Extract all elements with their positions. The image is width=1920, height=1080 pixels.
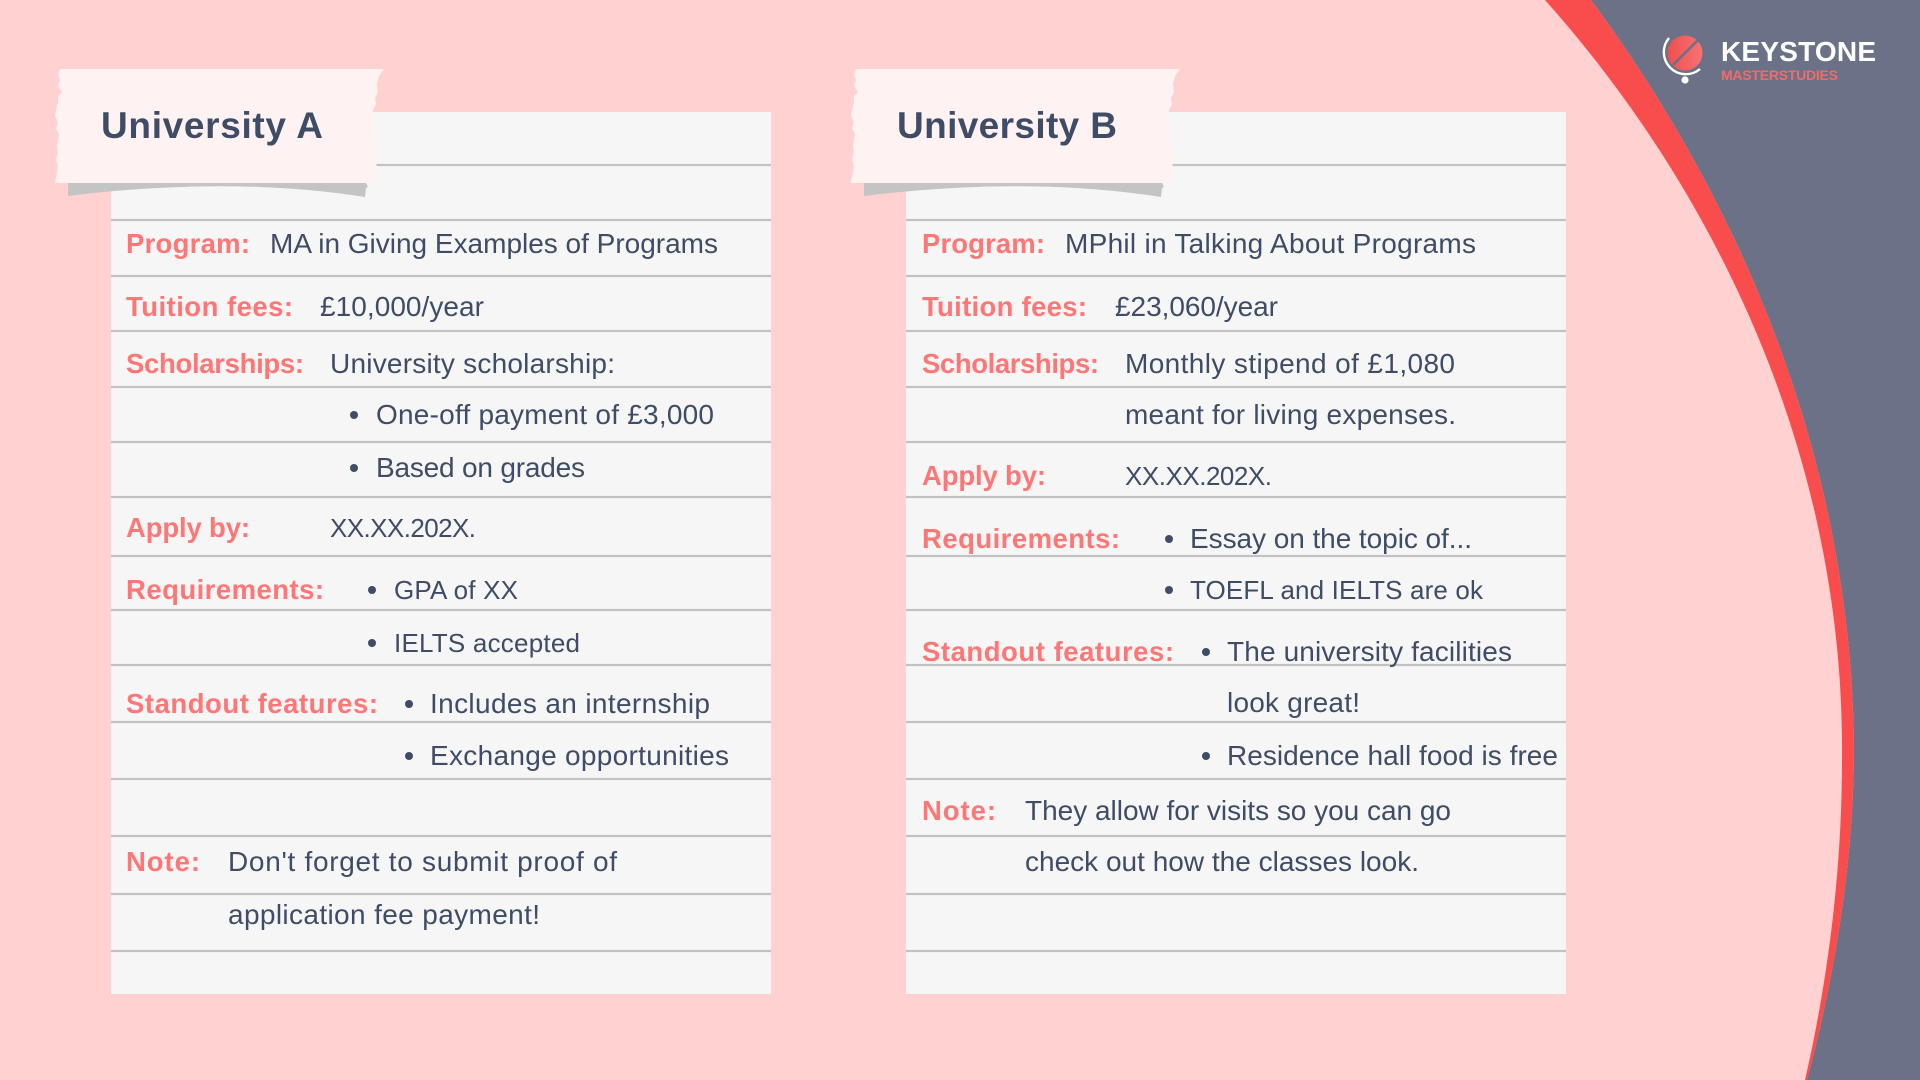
tape B bbox=[851, 69, 1180, 183]
row: requirements: Essay on the topic of... bbox=[1190, 523, 1472, 554]
row: apply by: Apply by: bbox=[126, 512, 250, 543]
row: scholarships: meant for living expenses. bbox=[1125, 399, 1456, 430]
tape shadow A bbox=[68, 183, 368, 197]
row: requirements: GPA of XX bbox=[394, 575, 518, 605]
row: note: Note: bbox=[126, 846, 200, 877]
row: note: application fee payment! bbox=[228, 899, 540, 930]
row: note bbox=[126, 846, 617, 930]
row: note: Don't forget to submit proof of bbox=[228, 846, 617, 877]
row: scholarships: Monthly stipend of £1,080 bbox=[1125, 348, 1455, 379]
panel: University A bbox=[55, 69, 771, 994]
row: note bbox=[922, 795, 1451, 877]
row: scholarships bbox=[922, 348, 1456, 430]
corner shape: grey panel bbox=[1591, 0, 1920, 1080]
logo wordmark: KEYSTONE bbox=[1721, 36, 1876, 67]
row: standout features bbox=[126, 688, 729, 771]
row: apply by: XX.XX.202X. bbox=[1125, 461, 1272, 491]
row: tuition fees bbox=[126, 291, 484, 322]
row: tuition fees: Tuition fees: bbox=[922, 291, 1087, 322]
heading: University B: University B bbox=[897, 105, 1117, 146]
row: tuition fees bbox=[922, 291, 1278, 322]
row: requirements bbox=[126, 574, 580, 658]
row: scholarships: One-off payment of £3,000 bbox=[376, 399, 714, 430]
heading: University A: University A bbox=[101, 105, 323, 146]
panel: University B bbox=[851, 69, 1566, 994]
row: requirements: IELTS accepted bbox=[394, 628, 580, 658]
row: note: They allow for visits so you can go bbox=[1025, 795, 1451, 826]
row: standout features: Residence hall food is free bbox=[1227, 740, 1558, 771]
logo subtitle: MASTERSTUDIES bbox=[1721, 67, 1838, 83]
row: requirements: Requirements: bbox=[922, 523, 1120, 554]
paper sheet B bbox=[906, 112, 1566, 994]
row: note: check out how the classes look. bbox=[1025, 846, 1419, 877]
row: standout features: Standout features: bbox=[126, 688, 378, 719]
row: standout features: Exchange opportunities bbox=[430, 740, 729, 771]
icon: globe bbox=[1664, 36, 1702, 84]
row: note: Note: bbox=[922, 795, 996, 826]
row: scholarships: University scholarship: bbox=[330, 348, 615, 379]
row: tuition fees: Tuition fees: bbox=[126, 291, 293, 322]
row: requirements: Requirements: bbox=[126, 574, 324, 605]
row: standout features bbox=[922, 636, 1558, 771]
row: scholarships: Scholarships: bbox=[922, 348, 1099, 379]
row: program: Program: bbox=[922, 228, 1045, 259]
row: tuition fees: £23,060/year bbox=[1115, 291, 1278, 322]
row: apply by bbox=[126, 512, 476, 543]
row: scholarships: Based on grades bbox=[376, 452, 585, 483]
row: standout features: Includes an internship bbox=[430, 688, 710, 719]
row: apply by bbox=[922, 460, 1272, 491]
row: tuition fees: £10,000/year bbox=[320, 291, 484, 322]
row: apply by: Apply by: bbox=[922, 460, 1046, 491]
paper sheet A bbox=[111, 112, 771, 994]
row: requirements: TOEFL and IELTS are ok bbox=[1190, 575, 1484, 605]
row: program: Program: bbox=[126, 228, 250, 259]
corner shape: red arc bbox=[1545, 0, 1854, 1080]
row: program: MPhil in Talking About Programs bbox=[1065, 228, 1476, 259]
row: scholarships: Scholarships: bbox=[126, 348, 304, 379]
row: standout features: Standout features: bbox=[922, 636, 1174, 667]
row: scholarships bbox=[126, 348, 714, 483]
row: apply by: XX.XX.202X. bbox=[330, 513, 476, 543]
tape shadow B bbox=[864, 183, 1164, 197]
logo bbox=[1664, 36, 1876, 84]
row: requirements bbox=[922, 523, 1484, 605]
tape A bbox=[55, 69, 384, 183]
row: standout features: look great! bbox=[1227, 687, 1360, 718]
row: standout features: The university facilities bbox=[1227, 636, 1512, 667]
row: program: MA in Giving Examples of Programs bbox=[270, 228, 718, 259]
